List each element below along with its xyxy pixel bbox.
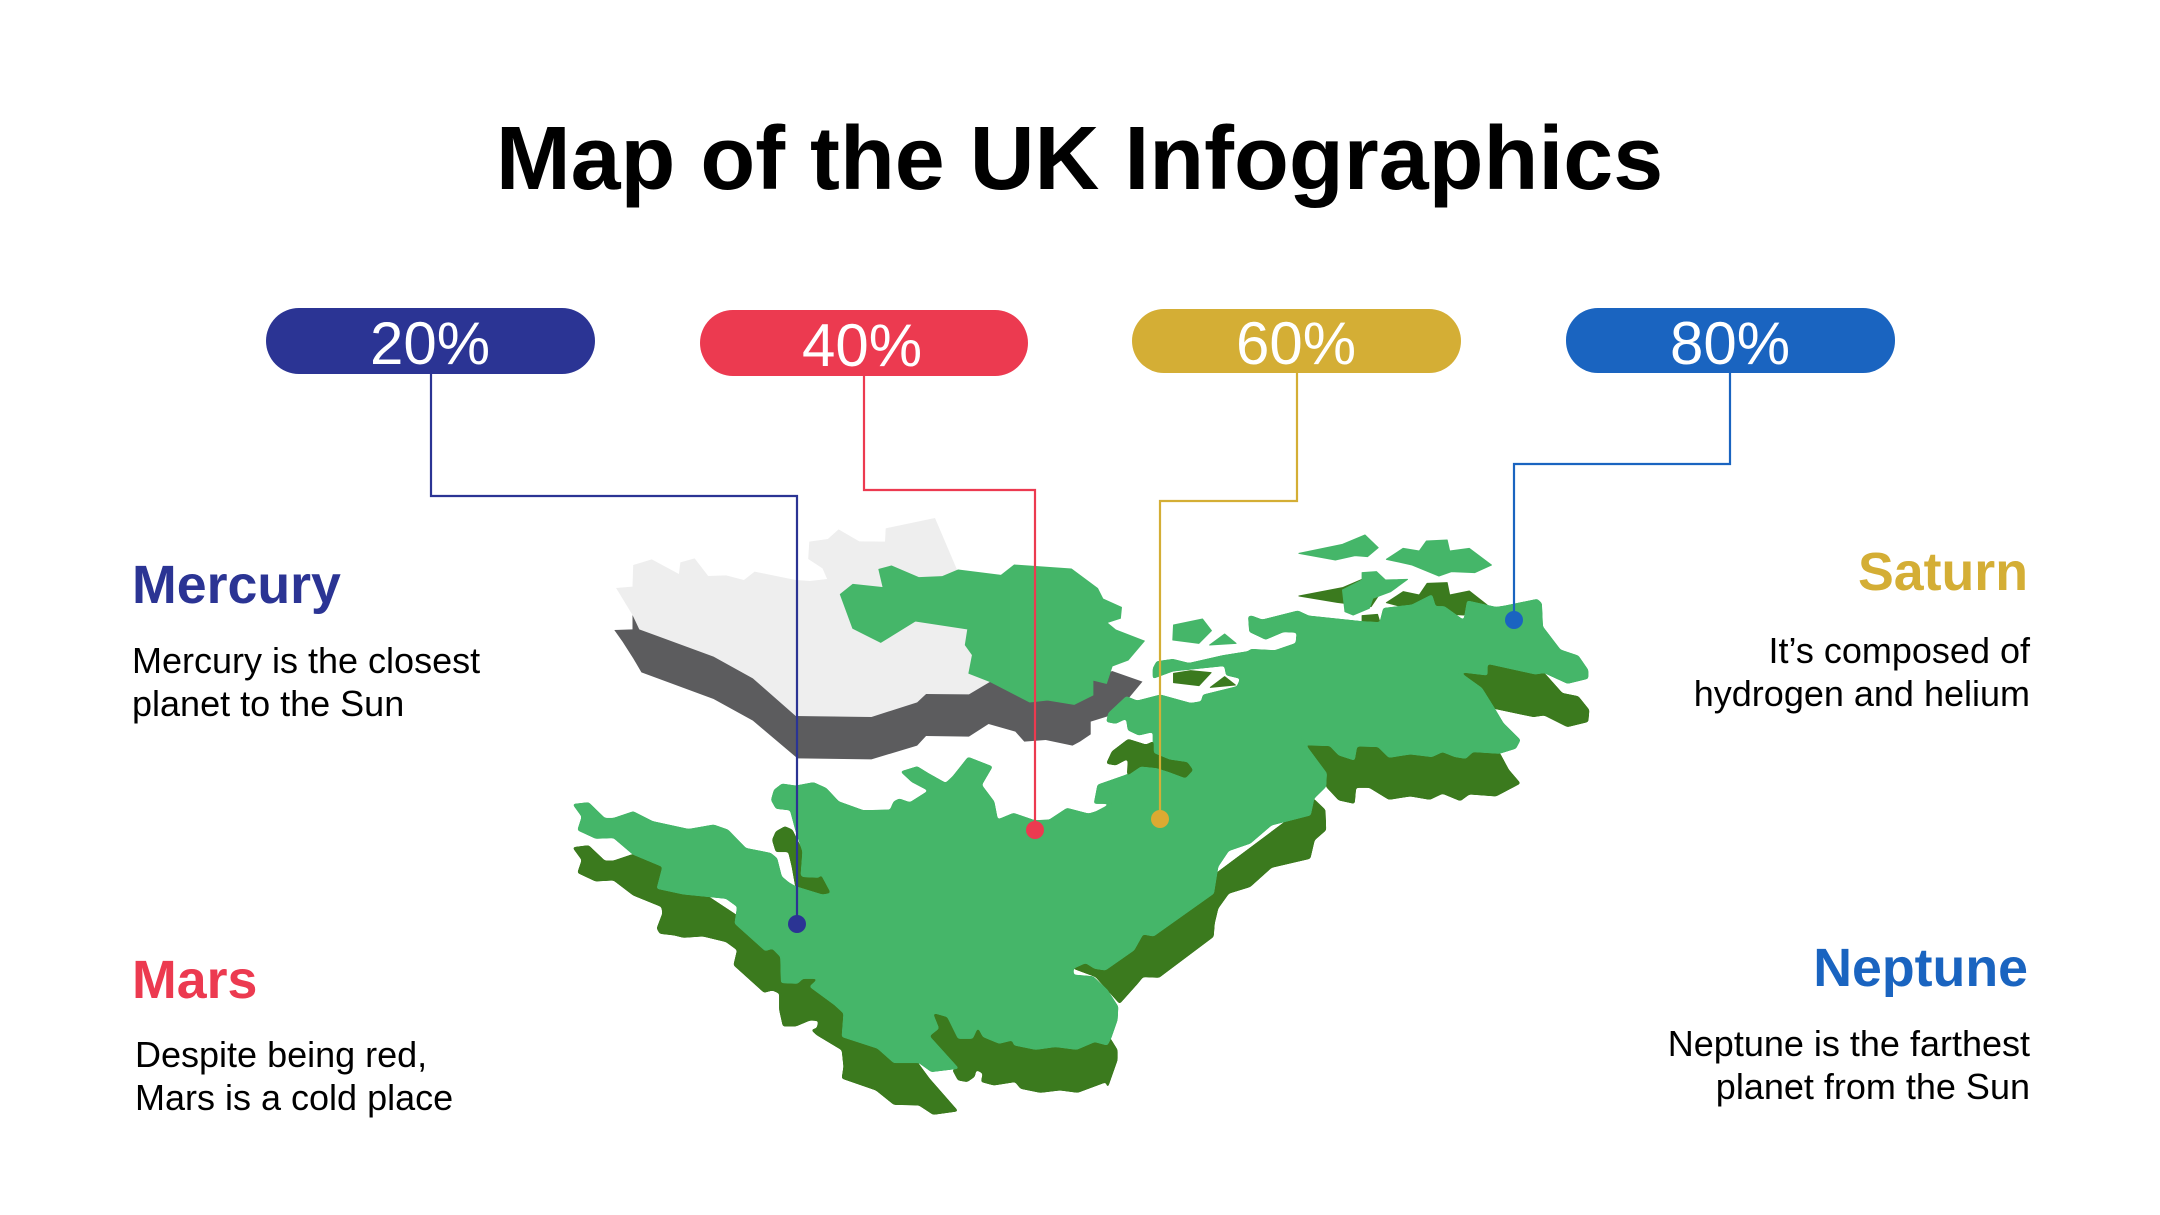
text block: Saturn: It’s composed of xyxy=(1769,630,2031,671)
region: green northern land xyxy=(840,565,1144,704)
region: dark northern patch two xyxy=(1386,583,1487,615)
region: dark south coast xyxy=(929,1012,1117,1092)
connector: 80% to Neptune xyxy=(1514,373,1730,620)
text block: Mars: Mars xyxy=(132,950,257,1010)
text block: Neptune: planet from the Sun xyxy=(1716,1066,2030,1107)
region: green main land xyxy=(573,595,1588,1072)
text block: Mars: Mars is a cold place xyxy=(135,1077,453,1118)
marker: Mars dot xyxy=(1026,821,1044,839)
text block: Mercury: Mercury xyxy=(132,555,341,615)
pill: 80%: 80% xyxy=(1670,310,1790,377)
region: dark coastal strip xyxy=(1107,739,1192,778)
region: dark west coast xyxy=(573,846,957,1114)
text block: Neptune: Neptune xyxy=(1813,938,2028,998)
title: Map of the UK Infographics xyxy=(496,109,1663,209)
text block: Mercury xyxy=(132,555,480,724)
connector: 40% to Mars xyxy=(864,376,1035,830)
connector: 20% to Mercury xyxy=(431,374,797,924)
region: green isle north two xyxy=(1386,540,1491,576)
region: dark north-east shelf xyxy=(1459,663,1589,727)
marker: Neptune dot xyxy=(1505,611,1523,629)
pill: 20% xyxy=(266,308,595,377)
text block: Saturn xyxy=(1694,542,2031,714)
marker: Mercury dot xyxy=(788,915,806,933)
region: dark islet xyxy=(1174,671,1211,686)
pill: 20%: 20% xyxy=(370,310,490,377)
text block: Saturn: hydrogen and helium xyxy=(1694,673,2030,714)
region: dark northern patch one xyxy=(1299,579,1380,607)
pill: 80% xyxy=(1566,308,1895,377)
text block: Mars xyxy=(132,950,453,1118)
map of the UK xyxy=(573,518,1589,1114)
region: dark inlet wall xyxy=(772,827,831,895)
connector: 60% to Saturn xyxy=(1160,373,1297,819)
text block: Neptune: Neptune is the farthest xyxy=(1668,1023,2030,1064)
pill: 40% xyxy=(700,310,1028,379)
pill: 60%: 60% xyxy=(1236,310,1356,377)
region: dark east coast xyxy=(1073,799,1326,1003)
text block: Mercury: Mercury is the closest xyxy=(132,640,480,681)
text block: Neptune xyxy=(1668,938,2030,1107)
region: dark northern patch three xyxy=(1362,614,1380,623)
pill: 60% xyxy=(1132,309,1461,377)
region: green islet xyxy=(1173,619,1211,643)
region: green small islet xyxy=(1210,634,1236,645)
region: dark grey land edge xyxy=(614,615,1142,759)
region: green isle middle xyxy=(1342,572,1407,615)
region: light grey land xyxy=(616,518,1024,717)
text block: Mercury: planet to the Sun xyxy=(132,683,404,724)
text block: Mars: Despite being red, xyxy=(135,1034,427,1075)
marker: Saturn dot xyxy=(1151,810,1169,828)
region: dark south-east shelf xyxy=(1296,732,1520,803)
pill: 40%: 40% xyxy=(802,312,922,379)
region: dark small islet xyxy=(1210,677,1235,687)
region: green isle north one xyxy=(1299,535,1378,560)
text block: Saturn: Saturn xyxy=(1858,542,2028,602)
